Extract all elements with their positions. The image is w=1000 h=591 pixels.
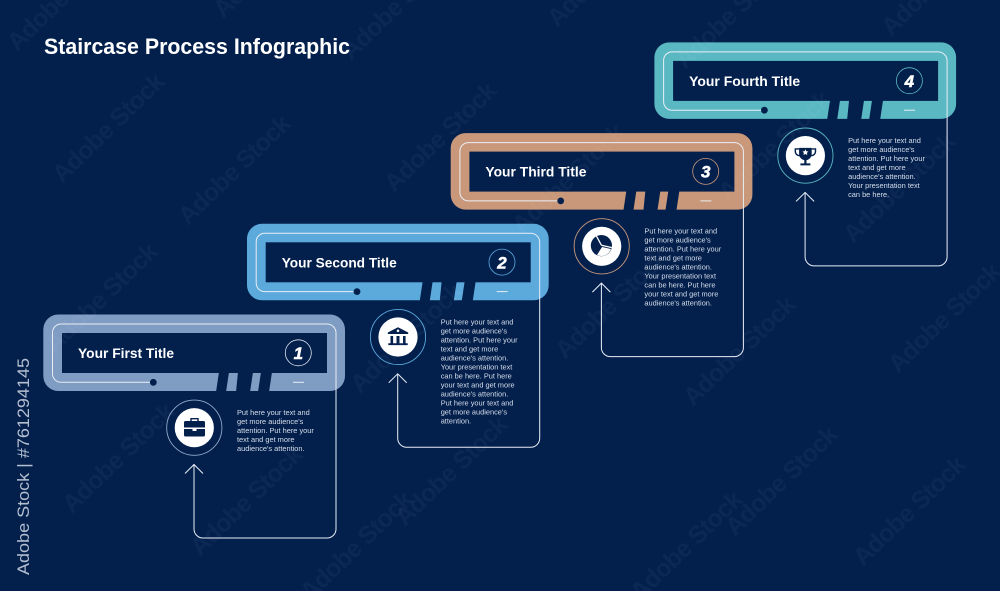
step 2 text: audience's attention.	[441, 389, 508, 398]
watermarks: Adobe Stock	[47, 67, 171, 188]
step 1 text: Put here your text and	[237, 408, 310, 417]
watermarks: Adobe Stock	[173, 109, 297, 230]
step 1 text: get more audience's	[237, 417, 304, 426]
watermarks: Adobe Stock	[345, 277, 469, 398]
step 4 number badge	[896, 68, 922, 94]
watermarks: Adobe Stock	[57, 397, 181, 518]
step 3 text: can be here. Put here	[644, 281, 715, 290]
step 2 text: audience's attention.	[441, 353, 508, 362]
step 2 text: attention. Put here your	[441, 335, 518, 344]
step 3 text: audience's attention.	[644, 263, 712, 272]
step 4 number badge: 4	[904, 72, 915, 91]
step 2 text: text and get more	[441, 344, 498, 353]
step 1 text: attention. Put here your	[237, 426, 314, 435]
step 2 text: get more audience's	[441, 326, 507, 335]
step 3 text: Put here your text and	[644, 227, 717, 236]
step 1 heading: Your First Title	[78, 345, 174, 361]
step 3 number badge: 3	[701, 163, 711, 182]
step 2	[247, 224, 549, 447]
step 2 number badge	[489, 249, 515, 275]
watermarks: Adobe Stock	[678, 290, 802, 411]
step 4 text: audience's attention.	[848, 172, 916, 181]
step 2 number badge: 2	[496, 253, 507, 272]
icon: briefcase	[167, 400, 222, 455]
step 1 number badge: 1	[294, 344, 303, 363]
step 4	[654, 42, 956, 266]
step 3 text: Your presentation text	[644, 272, 716, 281]
step 4 text: attention. Put here your	[848, 154, 925, 163]
step 1 number badge	[285, 340, 311, 366]
step 4 text: get more audience's	[848, 145, 915, 154]
step 3	[451, 133, 752, 357]
step 2 band	[247, 224, 549, 301]
step 1 text: text and get more	[237, 435, 295, 444]
step 4 text: Your presentation text	[848, 181, 920, 190]
watermarks: Adobe Stock	[720, 420, 844, 541]
step 2 text: Your presentation text	[441, 362, 512, 371]
stock id side label: Adobe Stock | #761294145	[14, 358, 33, 575]
step 1 connector line and arrow	[52, 324, 336, 538]
watermarks: Adobe Stock	[379, 76, 503, 197]
step 3 heading: Your Third Title	[485, 164, 587, 180]
icon: pie chart	[574, 219, 629, 274]
step 4 text: text and get more	[848, 163, 906, 172]
step 3 text: get more audience's	[644, 236, 711, 245]
step 1 band	[43, 314, 345, 392]
watermarks: Adobe Stock	[390, 410, 514, 531]
step 3 number badge	[693, 158, 719, 184]
step 1 text: audience's attention.	[237, 444, 305, 453]
step 3 connector line and arrow	[460, 143, 743, 357]
watermarks: Adobe Stock	[507, 118, 631, 239]
step 4 text: can be here.	[848, 190, 889, 199]
step 2 text: your text and get more	[441, 380, 515, 389]
step 4 heading: Your Fourth Title	[689, 73, 800, 89]
step 4 text: Put here your text and	[848, 136, 921, 145]
icon: bank	[370, 309, 426, 365]
watermarks: Adobe Stock	[838, 127, 962, 248]
step 2 text: attention.	[441, 416, 471, 425]
watermarks: Adobe Stock	[550, 243, 674, 364]
step 1	[43, 314, 345, 538]
step 2 heading: Your Second Title	[282, 254, 397, 270]
step 3 text: attention. Put here your	[644, 245, 722, 254]
step 2 connector line and arrow	[256, 233, 540, 447]
title: Staircase Process Infographic	[44, 34, 350, 59]
icon: trophy	[778, 128, 833, 183]
watermarks: Adobe Stock	[848, 450, 972, 571]
step 2 text: Put here your text and	[441, 317, 513, 326]
step 2 text: can be here. Put here	[441, 371, 512, 380]
step 4 band	[654, 42, 956, 120]
step 4 connector line and arrow	[664, 52, 947, 266]
step 3 text: your text and get more	[644, 290, 718, 299]
watermarks: Adobe Stock	[185, 440, 309, 561]
watermarks: Adobe Stock	[713, 85, 837, 206]
step 2 text: Put here your text and	[441, 398, 513, 407]
step 3 text: audience's attention.	[644, 299, 712, 308]
watermarks: Adobe Stock	[40, 237, 164, 358]
step 3 text: text and get more	[644, 254, 702, 263]
step 2 text: get more audience's	[441, 407, 507, 416]
step 3 band	[451, 133, 752, 211]
